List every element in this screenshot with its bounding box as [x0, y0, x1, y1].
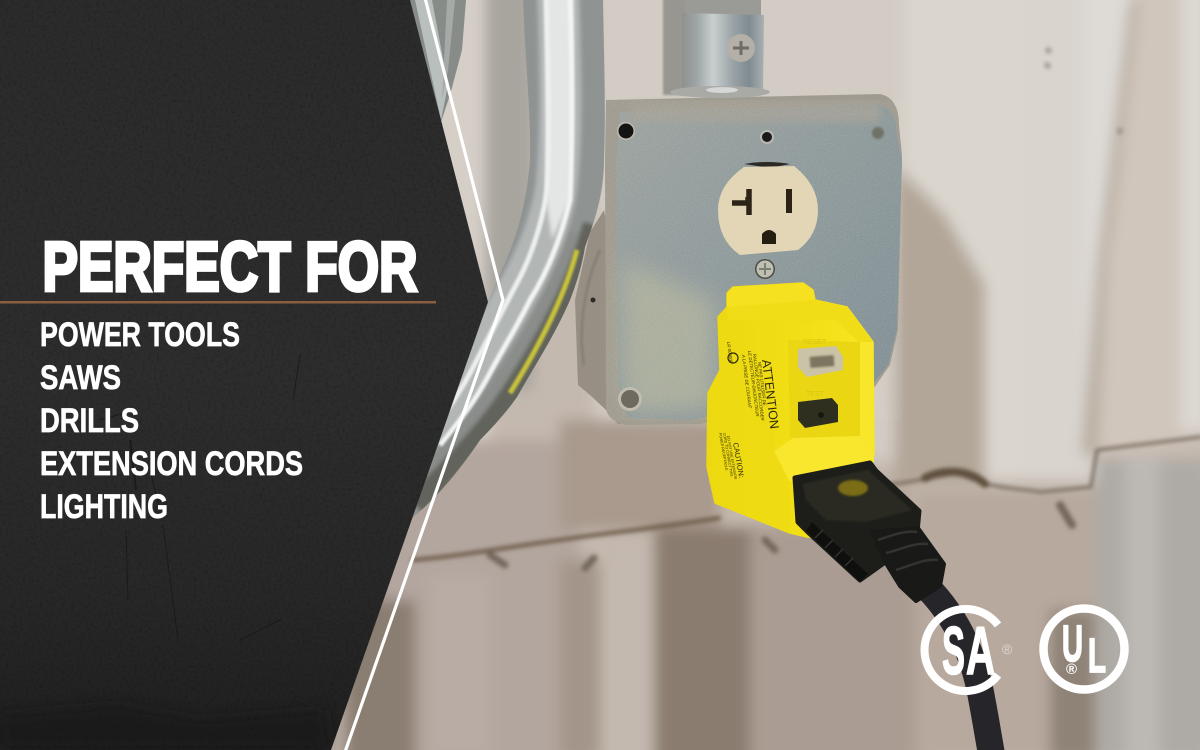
wall outlet — [718, 162, 818, 279]
warning text: ATTENTION — [759, 359, 781, 430]
left face shading — [773, 451, 788, 479]
button labels: RESET — [803, 339, 827, 346]
pipe broad mid tone — [437, 0, 583, 448]
CSA certification logo: A — [966, 613, 995, 689]
box rim — [605, 94, 902, 425]
power cord — [925, 585, 992, 750]
heading: PERFECT FOR — [42, 228, 418, 306]
translucent top face — [803, 470, 912, 522]
use case list: LIGHTING — [40, 488, 168, 526]
warning text: RALLONGE POUR RACCORDER — [752, 354, 765, 422]
black plug — [795, 463, 944, 601]
divider rule — [0, 301, 436, 304]
mounting holes — [617, 122, 635, 140]
warning text: CORD TO CONNECT THIS — [722, 432, 734, 477]
pipe yellow reflection — [510, 250, 577, 393]
warning text: DO NOT USE EXTENSION — [726, 435, 738, 480]
white chevron outline — [345, 0, 503, 750]
pipe sheen line B — [440, 0, 572, 445]
metal conduit collar — [663, 0, 770, 98]
use case list — [40, 316, 303, 526]
pipe sheen line A — [450, 0, 550, 412]
pipe dark lower band — [415, 225, 594, 505]
warning text — [718, 342, 781, 480]
reset button — [798, 346, 843, 377]
warning text: NE PAS UTILISER DE — [757, 362, 767, 406]
plug head — [795, 463, 919, 580]
curved silver conduit pipe — [412, 0, 605, 518]
adapter body — [707, 283, 874, 540]
yellow GFCI adapter — [707, 283, 874, 540]
use case list: POWER TOOLS — [40, 316, 240, 354]
test button — [798, 398, 838, 428]
warning text: A LA PRISE DE COURANT — [741, 354, 753, 409]
top ledge — [727, 283, 815, 307]
rear box side — [575, 210, 622, 424]
warning text: LR 000000 — [726, 342, 734, 364]
UL certification logo: L — [1088, 630, 1106, 683]
warning text: CAUTION: — [731, 442, 746, 479]
box cover face — [616, 105, 902, 420]
junction box — [575, 94, 902, 425]
UL certification logo: ® — [1066, 661, 1077, 678]
use case list: DRILLS — [40, 402, 139, 440]
certification mark — [728, 353, 738, 363]
strain relief — [884, 527, 946, 603]
ribbed grip — [806, 522, 868, 582]
grimy left face patch — [622, 260, 715, 414]
outlet screw — [755, 259, 775, 279]
button labels: TEST — [806, 391, 825, 398]
CSA certification logo: S — [942, 613, 965, 689]
rear conduit pipe — [405, 0, 466, 122]
panel scratches — [100, 355, 300, 640]
use case list: SAWS — [40, 359, 121, 397]
UL certification logo: U — [1062, 615, 1083, 672]
CSA certification logo — [925, 609, 1013, 691]
warning text: POWER RECEPTACLE — [718, 432, 729, 471]
wall mortar seams — [413, 50, 1200, 568]
left dark panel — [0, 0, 488, 750]
screw bottom left — [618, 387, 642, 411]
top bright wash — [545, 0, 573, 240]
button labels — [803, 339, 827, 398]
collar screw — [727, 34, 755, 62]
UL certification logo — [1044, 608, 1124, 690]
lower chamfer — [773, 436, 874, 482]
warning text: LE DETECTEUR-DISJONCTEUR — [747, 351, 760, 418]
use case list: EXTENSION CORDS — [40, 445, 303, 483]
front recess — [794, 340, 860, 438]
CSA certification logo: ® — [1002, 641, 1013, 657]
